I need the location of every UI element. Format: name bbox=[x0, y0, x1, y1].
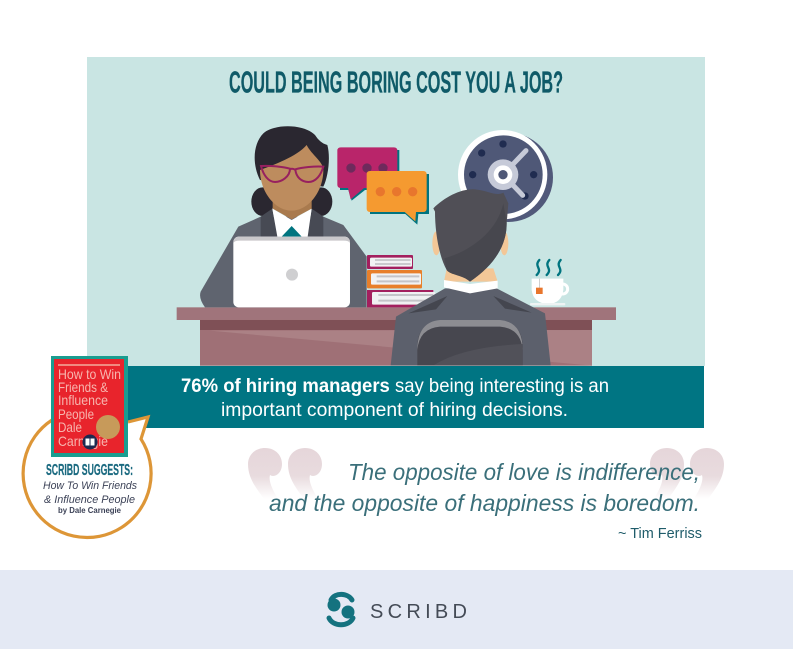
illustration: stack of books bbox=[367, 255, 435, 307]
laptop bbox=[233, 237, 350, 307]
face bbox=[260, 145, 323, 211]
banner line 1: 76% of hiring managers say being interesting is an bbox=[181, 376, 609, 397]
callout book title bbox=[43, 480, 137, 506]
ears bbox=[432, 231, 440, 255]
book cover: People bbox=[58, 406, 94, 422]
glasses bbox=[261, 166, 323, 182]
orange bubble bbox=[370, 174, 429, 225]
steam bbox=[537, 260, 561, 275]
quote line 2: and the opposite of happiness is boredom. bbox=[269, 490, 700, 516]
shirt bbox=[272, 209, 312, 237]
book cover: Carnegie bbox=[58, 433, 108, 449]
logo dots bbox=[328, 598, 354, 618]
book cover bbox=[51, 356, 128, 457]
book cover: Friends & bbox=[58, 379, 109, 395]
quote attribution: ~ Tim Ferriss bbox=[618, 526, 702, 542]
bookmark icon bbox=[82, 434, 98, 450]
neck bbox=[273, 198, 312, 219]
collar bbox=[444, 280, 498, 293]
quote text bbox=[269, 459, 700, 516]
illustration: woman interviewer bbox=[200, 126, 367, 307]
head and upper body bbox=[251, 126, 332, 237]
illustration: speech bubbles bbox=[337, 147, 429, 225]
lapels bbox=[261, 209, 323, 237]
head bbox=[432, 189, 508, 293]
opening quote mark bbox=[248, 448, 322, 499]
quote marks bbox=[248, 448, 724, 499]
closing quote mark bbox=[650, 448, 724, 499]
hair bbox=[433, 189, 508, 282]
Scribd logo bbox=[328, 594, 467, 625]
footer bar bbox=[0, 570, 793, 649]
panel: illustration background bbox=[87, 57, 705, 366]
tie bbox=[282, 226, 302, 237]
illustration: coffee cup bbox=[530, 260, 568, 305]
hair bbox=[255, 126, 329, 187]
book cover: Dale bbox=[58, 419, 82, 435]
magenta bubble bbox=[340, 150, 399, 201]
illustration: desk bbox=[177, 307, 616, 366]
logo icon bbox=[329, 594, 353, 625]
neck bbox=[444, 268, 498, 282]
chair bbox=[417, 320, 523, 365]
hair buns bbox=[251, 187, 274, 216]
callout: Scribd suggests bbox=[23, 356, 151, 538]
suit bbox=[391, 288, 551, 365]
quote line 1: The opposite of love is indifference, bbox=[348, 459, 700, 485]
jacket bbox=[200, 217, 367, 307]
callout book title: & Influence People bbox=[44, 494, 135, 506]
illustration: man seen from behind bbox=[391, 189, 551, 365]
callout book title: How To Win Friends bbox=[43, 480, 137, 492]
banner text bbox=[181, 376, 609, 421]
book cover: How to Win bbox=[58, 366, 121, 382]
banner bbox=[127, 366, 704, 428]
logo wordmark: SCRIBD bbox=[370, 601, 467, 623]
illustration: wall clock bbox=[458, 130, 553, 222]
banner line 2: important component of hiring decisions. bbox=[221, 400, 568, 421]
book cover: Influence bbox=[58, 392, 108, 408]
callout bubble bbox=[23, 417, 151, 538]
callout heading: SCRIBD SUGGESTS: bbox=[46, 462, 133, 479]
callout author: by Dale Carnegie bbox=[58, 506, 122, 515]
